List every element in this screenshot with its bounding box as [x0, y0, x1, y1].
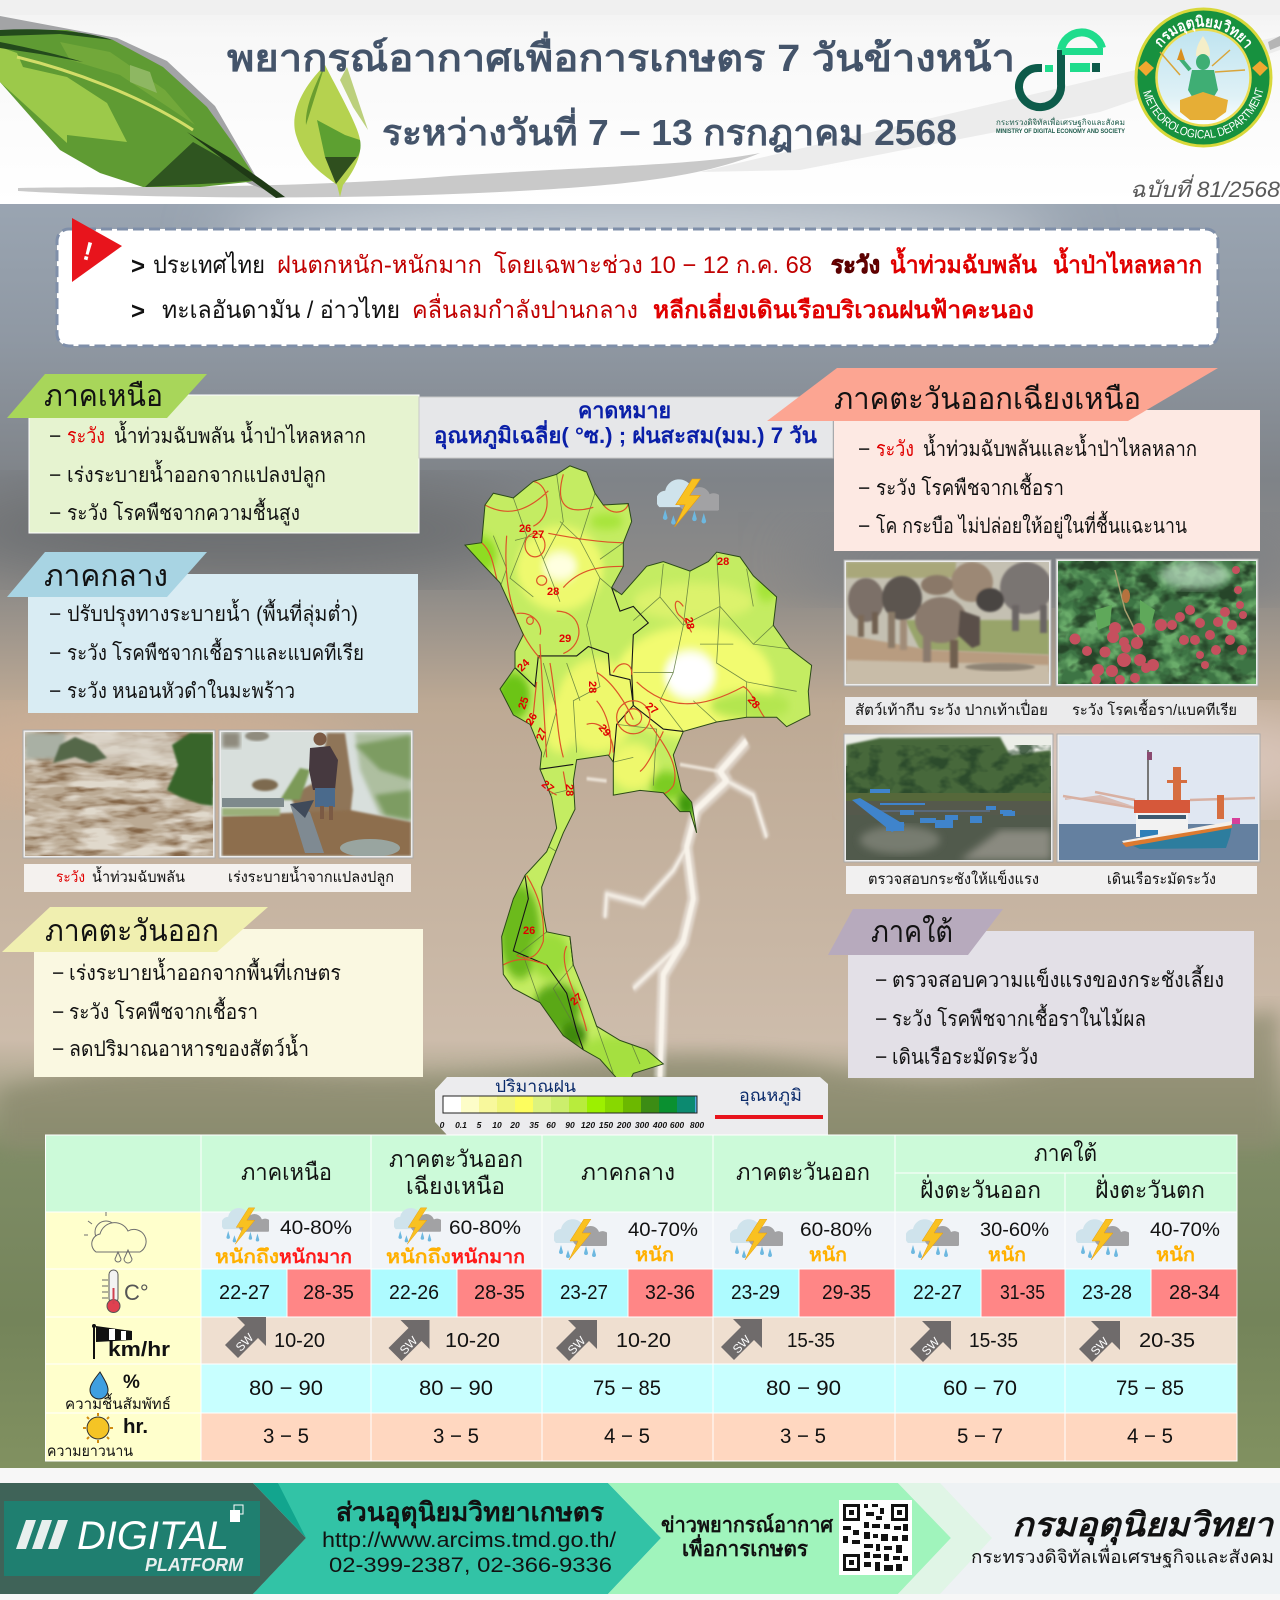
advice list: north: เร่งระบายน้ำออกจากแปลงปลูก [67, 460, 326, 488]
sunshine duration row: 3 − 5 [780, 1425, 826, 1448]
icon: weather [84, 1212, 146, 1263]
caption band: flood photos [24, 864, 411, 892]
rainfall scale ticks: 600 [670, 1120, 684, 1130]
temperature contour labels: 29 [559, 633, 571, 645]
advice list: east: − [52, 962, 64, 985]
logo: digital economy ministry: MINISTRY OF DIGITAL ECONOMY AND SOCIETY [996, 129, 1125, 135]
advice list: north: − [49, 464, 61, 487]
rain intensity words [215, 1245, 1195, 1268]
temperature row: 32-36 [645, 1282, 695, 1304]
rain intensity words: หนัก [635, 1245, 674, 1266]
temperature contour labels: 27 [534, 726, 550, 742]
icon: warning triangle: ! [80, 235, 96, 267]
rain percentages: 60-80% [449, 1218, 521, 1239]
warning line 1: > [131, 253, 145, 280]
panel: central region [7, 552, 418, 713]
tab: east [2, 907, 268, 952]
warning line 2: ทะเลอันดามัน / อ่าวไทย [162, 296, 400, 324]
sunshine duration row: 3 − 5 [433, 1425, 479, 1448]
icon: sunshine hours: hr. [123, 1416, 148, 1438]
rainfall scale ticks: 800 [690, 1120, 704, 1130]
panel: eastern region [2, 907, 423, 1077]
temperature row: 31-35 [1000, 1282, 1045, 1304]
warning line 1: ประเทศไทย [153, 251, 265, 279]
icon: thermometer: C° [124, 1280, 149, 1305]
advice list: north: − [49, 502, 61, 525]
advice list: northeast [858, 434, 1197, 539]
rainfall scale ticks: 5 [477, 1120, 482, 1130]
caption band: flood photos: ระวัง [56, 869, 85, 886]
icon: humidity: ความชื้นสัมพัทธ์ [65, 1393, 171, 1413]
icon: large green leaf [0, 16, 286, 198]
relative humidity row: 80 − 90 [766, 1377, 841, 1400]
warning line 1: น้ำท่วมฉับพลัน [890, 246, 1038, 279]
logo: meteorological department seal: กรมอุตุนิยมวิทยา [1156, 14, 1252, 48]
icon: warning triangle [72, 218, 122, 282]
table cell backgrounds [46, 1135, 1237, 1461]
icon: windsock: km/hr [108, 1339, 170, 1361]
rainfall scale ticks: 120 [581, 1120, 595, 1130]
icon: sunshine hours [47, 1413, 148, 1460]
wind speeds: 10-20 [274, 1330, 325, 1352]
temperature contour labels: 28 [563, 784, 575, 796]
rain intensity words: หนักถึง [215, 1246, 279, 1268]
temperature row [219, 1282, 1220, 1304]
wind arrows: SW [1088, 1334, 1112, 1358]
panel: rainfall and temperature legend [435, 1077, 828, 1135]
caption band: cages and boat: เดินเรือระมัดระวัง [1107, 871, 1216, 888]
photo: draining water from farm plot [219, 730, 413, 858]
relative humidity row [249, 1377, 1184, 1400]
rainfall scale ticks: 20 [509, 1120, 520, 1130]
contact information: ส่วนอุตุนิยมวิทยาเกษตร [336, 1497, 604, 1529]
panel: rainfall and temperature legend: ปริมาณฝน [495, 1077, 576, 1096]
sunshine duration row: 3 − 5 [263, 1425, 309, 1448]
temperature contour labels [515, 523, 762, 1008]
advice list: central: − [49, 642, 61, 665]
panel: northeast region [767, 368, 1260, 551]
rain intensity words: หนักมาก [279, 1247, 352, 1268]
panel: map legend heading: คาดหมาย [578, 398, 671, 423]
icon: windsock [92, 1324, 170, 1361]
caption band: livestock and fruit [845, 697, 1257, 725]
sunshine duration row: 5 − 7 [957, 1425, 1003, 1448]
temperature row: 23-29 [731, 1282, 780, 1304]
icon: thermometer [102, 1270, 149, 1312]
temperature contour labels: 26 [523, 925, 535, 937]
advice list: central: ปรับปรุงทางระบายน้ำ (พื้นที่ลุ่มต่ำ) [67, 599, 358, 627]
photo: flash flood [23, 730, 215, 858]
warning line 1: น้ำป่าไหลหลาก [1053, 246, 1202, 279]
rainfall scale ticks: 90 [565, 1120, 575, 1130]
advice list: north: ระวัง โรคพืชจากความชื้นสูง [67, 498, 300, 526]
rain intensity words: หนัก [988, 1245, 1026, 1266]
temperature row: 22-26 [389, 1282, 439, 1304]
warning line 1: โดยเฉพาะช่วง 10 − 12 ก.ค. 68 [494, 251, 812, 279]
advice list: northeast: − [858, 515, 870, 538]
rain percentages: 40-80% [280, 1218, 352, 1239]
wind speeds [274, 1330, 1195, 1352]
tab: north: ภาคเหนือ [44, 380, 163, 413]
footer chevrons [253, 1483, 331, 1594]
warning line 1 [131, 246, 1202, 280]
rainfall scale ticks: 400 [652, 1120, 667, 1130]
rain chance row [215, 1208, 1220, 1268]
rainfall colour scale [443, 1096, 697, 1113]
advice list: east: − [52, 1001, 64, 1024]
rainfall scale ticks: 0.1 [455, 1120, 467, 1130]
advice list: south [875, 965, 1224, 1069]
table column headings: ภาคตะวันออก [389, 1146, 523, 1172]
table column headings: ภาคใต้ [1034, 1140, 1097, 1166]
temperature contour labels: 28 [586, 681, 598, 693]
temperature contour labels: 27 [568, 991, 585, 1008]
wind arrows: SW [233, 1330, 257, 1354]
rainfall scale ticks: 10 [492, 1120, 502, 1130]
panel: north region [7, 374, 419, 533]
temperature row: 22-27 [913, 1282, 962, 1304]
tab: central: ภาคกลาง [44, 560, 168, 593]
advice list: east: ระวัง โรคพืชจากเชื้อรา [69, 997, 258, 1024]
sunshine duration row: 4 − 5 [604, 1425, 650, 1448]
warning line 2 [131, 292, 1034, 325]
temperature contour labels: 28 [717, 556, 729, 568]
table column headings: ภาคตะวันออก [736, 1159, 870, 1185]
digital platform logo: PLATFORM [145, 1555, 244, 1575]
advice list: east [52, 958, 341, 1061]
advice list: central: − [49, 680, 61, 703]
temperature legend [715, 1086, 823, 1119]
rainfall scale ticks: 200 [616, 1120, 631, 1130]
table column headings [241, 1140, 1205, 1203]
photo: buffalo [844, 560, 1052, 686]
caption band: livestock and fruit: สัตว์เท้ากีบ ระวัง ปากเท้าเปื่อย [855, 699, 1048, 719]
header band [0, 0, 1280, 204]
warning line 1: ระวัง [831, 252, 880, 279]
rainfall scale ticks: 150 [599, 1120, 613, 1130]
temperature row: 23-28 [1082, 1282, 1132, 1304]
digital platform logo: DIGITAL [77, 1514, 229, 1558]
warning line 2: > [131, 298, 145, 325]
rainfall scale ticks: 35 [529, 1120, 539, 1130]
rain intensity words: หนักถึง [386, 1246, 451, 1268]
digital platform logo [4, 1501, 260, 1576]
tab: north [7, 374, 207, 418]
department name: กรมอุตุนิยมวิทยา [1012, 1506, 1275, 1546]
title: ระหว่างวันที่ 7 − 13 กรกฎาคม 2568 [382, 107, 957, 153]
tab: south: ภาคใต้ [871, 915, 953, 949]
temperature row: 28-35 [474, 1282, 525, 1304]
tab: central [7, 552, 207, 597]
tab: south [828, 909, 1003, 955]
caption band: flood photos: น้ำท่วมฉับพลัน [92, 866, 185, 886]
panel: map legend heading [419, 397, 833, 458]
temperature row: 28-34 [1169, 1282, 1220, 1304]
advice list: north: น้ำท่วมฉับพลัน น้ำป่าไหลหลาก [114, 421, 366, 448]
panel: warning box [57, 218, 1218, 346]
QR caption: ข่าวพยากรณ์อากาศ [661, 1513, 834, 1537]
temperature contour labels: 28 [682, 616, 696, 630]
footer band [0, 1468, 1280, 1600]
rain percentages: 40-70% [628, 1220, 698, 1241]
edition number: ฉบับที่ 81/2568 [1130, 174, 1280, 202]
advice list: south: ตรวจสอบความแข็งแรงของกระชังเลี้ยง [892, 965, 1224, 992]
forecast table [46, 1135, 1237, 1461]
icon: humidity [65, 1372, 171, 1413]
title [227, 31, 1015, 153]
logo: digital economy ministry [996, 32, 1125, 135]
wind speeds: 15-35 [787, 1330, 835, 1352]
advice list: east: เร่งระบายน้ำออกจากพื้นที่เกษตร [69, 958, 341, 985]
rain percentages: 30-60% [980, 1220, 1049, 1241]
rain intensity words: หนักมาก [451, 1247, 525, 1268]
table column headings: ภาคเหนือ [241, 1159, 332, 1185]
rainfall scale ticks: 60 [546, 1120, 556, 1130]
temperature contour labels: 27 [539, 778, 556, 795]
wind row [225, 1317, 1195, 1362]
table column headings: เฉียงเหนือ [406, 1173, 505, 1199]
wind speeds: 10-20 [445, 1330, 500, 1352]
relative humidity row: 75 − 85 [593, 1377, 661, 1400]
contact information [322, 1497, 616, 1577]
temperature row: 23-27 [560, 1282, 608, 1304]
rain percentages: 40-70% [1150, 1220, 1220, 1241]
caption band: flood photos: เร่งระบายน้ำจากแปลงปลูก [228, 866, 394, 886]
wind arrows: SW [730, 1332, 754, 1356]
wind arrows: SW [397, 1333, 421, 1357]
relative humidity row: 80 − 90 [419, 1377, 493, 1400]
advice list: south: − [875, 969, 887, 992]
temperature legend: อุณหภูมิ [739, 1086, 802, 1106]
advice list: northeast: น้ำท่วมฉับพลันและน้ำป่าไหลหลาก [923, 434, 1197, 461]
QR code [839, 1500, 912, 1575]
wind arrows: SW [919, 1334, 943, 1358]
rainfall scale ticks: 0 [440, 1120, 445, 1130]
relative humidity row: 60 − 70 [943, 1377, 1017, 1400]
tab: northeast [767, 368, 1218, 421]
temperature row: 22-27 [219, 1282, 270, 1304]
icon: thunderstorm cloud on map [656, 479, 723, 527]
advice list: central: ระวัง หนอนหัวดำในมะพร้าว [67, 679, 295, 703]
wind arrows: SW [565, 1333, 589, 1357]
advice list: north: − [49, 425, 61, 448]
advice list: northeast: ระวัง โรคพืชจากเชื้อรา [876, 473, 1064, 500]
advice list: east: − [52, 1038, 64, 1061]
advice list: south: ระวัง โรคพืชจากเชื้อราในไม้ผล [892, 1004, 1146, 1031]
tab: east: ภาคตะวันออก [45, 915, 219, 948]
advice list: east: ลดปริมาณอาหารของสัตว์น้ำ [69, 1034, 309, 1061]
advice list: north: ระวัง [67, 425, 105, 448]
department name: กระทรวงดิจิทัลเพื่อเศรษฐกิจและสังคม [971, 1544, 1274, 1568]
icon: sunshine hours: ความยาวนาน [47, 1443, 133, 1460]
rain percentages: 60-80% [800, 1220, 872, 1241]
advice list: central [49, 599, 364, 703]
caption band: cages and boat [846, 866, 1257, 894]
caption band: cages and boat: ตรวจสอบกระชังให้แข็งแรง [868, 869, 1039, 888]
advice list: south: − [875, 1008, 887, 1031]
wind speeds: 20-35 [1139, 1330, 1195, 1352]
photo: fishing boat [1057, 734, 1260, 862]
rain intensity words: หนัก [809, 1245, 847, 1266]
icon: humidity: % [123, 1372, 140, 1393]
icon: small green leaf [294, 65, 368, 197]
warning line 2: หลีกเลี่ยงเดินเรือบริเวณฝนฟ้าคะนอง [653, 292, 1034, 324]
advice list: northeast: โค กระบือ ไม่ปล่อยให้อยู่ในที่ชื้นแฉะนาน [876, 511, 1187, 539]
sunshine duration row [263, 1425, 1173, 1448]
advice list: northeast: ระวัง [876, 438, 914, 461]
wind speeds: 15-35 [969, 1330, 1018, 1352]
warning line 2: คลื่นลมกำลังปานกลาง [412, 293, 638, 324]
temperature contour labels: 28 [745, 694, 762, 711]
advice list: north [49, 421, 366, 526]
panel: map legend heading: อุณหภูมิเฉลี่ย( °ซ.) ; ฝนสะสม(มม.) 7 วัน [434, 419, 817, 450]
logo: digital economy ministry: กระทรวงดิจิทัลเพื่อเศรษฐกิจและสังคม [996, 116, 1125, 127]
temperature row: 28-35 [303, 1282, 354, 1304]
rainfall scale ticks [440, 1120, 704, 1130]
panel: southern region [828, 909, 1254, 1078]
temperature contour labels: 26 [519, 523, 531, 535]
warning line 1: ฝนตกหนัก-หนักมาก [277, 252, 482, 279]
wind speeds: 10-20 [616, 1330, 671, 1352]
rain intensity words: หนัก [1156, 1245, 1195, 1266]
rain percentages [280, 1218, 1220, 1241]
contact information: 02-399-2387, 02-366-9336 [329, 1554, 612, 1577]
row icons [47, 1212, 171, 1460]
advice list: northeast: − [858, 477, 870, 500]
temperature contour labels: 24 [515, 656, 533, 674]
icons: thunderstorm [221, 1208, 1132, 1260]
photo: fish cages [844, 734, 1053, 862]
sunshine duration row: 4 − 5 [1127, 1425, 1173, 1448]
temperature contour labels: 27 [643, 700, 660, 717]
logo: meteorological department seal [1134, 8, 1272, 148]
temperature contour labels: 25 [516, 695, 532, 711]
table column headings: ภาคกลาง [581, 1159, 675, 1185]
table column headings: ฝั่งตะวันออก [920, 1174, 1041, 1203]
relative humidity row: 75 − 85 [1116, 1377, 1184, 1400]
rainfall scale ticks: 300 [635, 1120, 649, 1130]
logo: meteorological department seal: METEOROLOGICAL DEPARTMENT [1143, 87, 1264, 138]
temperature row: 29-35 [822, 1282, 871, 1304]
department name [971, 1506, 1275, 1568]
table column headings: ฝั่งตะวันตก [1095, 1174, 1205, 1203]
QR caption [661, 1513, 834, 1561]
advice list: central: ระวัง โรคพืชจากเชื้อราและแบคทีเรีย [67, 638, 364, 665]
title: พยากรณ์อากาศเพื่อการเกษตร 7 วันข้างหน้า [227, 31, 1015, 80]
header swoosh [700, 36, 1280, 172]
advice list: central: − [49, 603, 61, 626]
temperature contour labels: 26 [524, 711, 540, 728]
QR caption: เพื่อการเกษตร [682, 1533, 809, 1561]
temperature contour labels: 27 [532, 529, 544, 541]
photo: lychee fruit [1056, 559, 1258, 686]
relative humidity row: 80 − 90 [249, 1377, 323, 1400]
map: Thailand rainfall and temperature [460, 460, 817, 1092]
temperature contour labels: 28 [547, 586, 559, 598]
caption band: livestock and fruit: ระวัง โรคเชื้อรา/แบคทีเรีย [1072, 699, 1237, 719]
temperature contour labels: 29 [596, 722, 613, 739]
advice list: south: − [875, 1046, 887, 1069]
advice list: northeast: − [858, 438, 870, 461]
advice list: south: เดินเรือระมัดระวัง [892, 1046, 1038, 1069]
wind arrows [225, 1317, 1120, 1362]
tab: northeast: ภาคตะวันออกเฉียงเหนือ [834, 383, 1141, 416]
contact information: http://www.arcims.tmd.go.th/ [322, 1529, 616, 1552]
